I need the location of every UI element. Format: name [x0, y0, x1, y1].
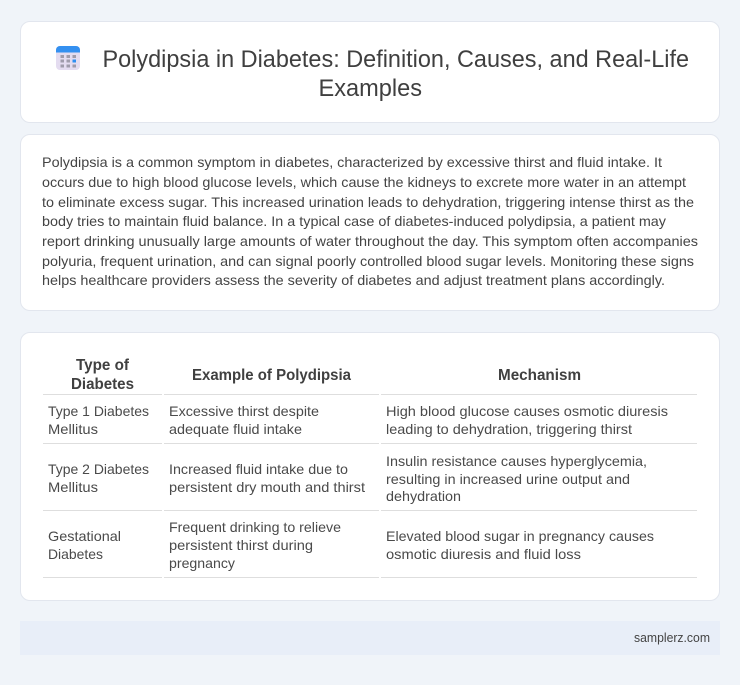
table row: Type 2 Diabetes Mellitus: Increased fluid intake due to — [169, 461, 348, 477]
panel: table card — [20, 332, 720, 601]
table row: Gestational Diabetes: Frequent drinking to relieve — [169, 519, 341, 535]
table row: Type 1 Diabetes Mellitus — [48, 403, 668, 437]
text block: description paragraph: Polydipsia is a common symptom in diabetes, characterized by excessive thirst and fluid intake. It — [42, 154, 662, 170]
table row: Gestational Diabetes: Gestational — [48, 528, 121, 544]
table row: Gestational Diabetes: osmotic diuresis and fluid loss — [386, 546, 581, 562]
panel: title card — [20, 21, 720, 123]
table row: Type 2 Diabetes Mellitus: dehydration — [386, 488, 461, 504]
table header row: Diabetes — [71, 376, 134, 393]
table row: Type 2 Diabetes Mellitus — [48, 453, 647, 504]
table row: Type 2 Diabetes Mellitus: persistent dry mouth and thirst — [169, 479, 365, 495]
table — [43, 357, 697, 578]
text block: description paragraph: occurs due to high blood glucose levels, which cause the kidneys to excrete more water in an attempt — [42, 174, 686, 190]
table row: Type 2 Diabetes Mellitus: Type 2 Diabetes — [48, 461, 149, 477]
text block: description paragraph: helps healthcare providers assess the severity of diabetes and adjust treatment plans accordingly. — [42, 272, 665, 288]
footer source text: samplerz.com — [634, 631, 710, 645]
title — [102, 46, 689, 102]
table row: Gestational Diabetes: Diabetes — [48, 546, 103, 562]
table header row — [71, 357, 581, 393]
text block: description paragraph: to eliminate excess sugar. This increased urination leads to dehydration, triggering intense thirst as the — [42, 194, 694, 210]
table row: Type 1 Diabetes Mellitus: leading to dehydration, triggering thirst — [386, 421, 632, 437]
table row: Type 1 Diabetes Mellitus: adequate fluid intake — [169, 421, 302, 437]
text block: description paragraph — [42, 154, 698, 288]
text block: description paragraph: report drinking unusually large amounts of water throughout the day. This symptom often accompanies — [42, 233, 698, 249]
title: Examples — [318, 75, 422, 102]
table row: Type 1 Diabetes Mellitus: Mellitus — [48, 421, 98, 437]
footer bar — [20, 621, 720, 655]
table row: Gestational Diabetes: Elevated blood sugar in pregnancy causes — [386, 528, 654, 544]
text block: description paragraph: polyuria, frequent urination, and can signal poorly controlled blood sugar levels. Monitoring these signs — [42, 253, 694, 269]
text block: description paragraph: body tries to maintain fluid balance. In a typical case of diabetes-induced polydipsia, a patient may — [42, 213, 666, 229]
table row: Gestational Diabetes — [48, 519, 654, 571]
table row: Type 1 Diabetes Mellitus: Type 1 Diabetes — [48, 403, 149, 419]
table row: Type 1 Diabetes Mellitus: High blood glucose causes osmotic diuresis — [386, 403, 668, 419]
table row: Type 2 Diabetes Mellitus: Insulin resistance causes hyperglycemia, — [386, 453, 647, 469]
table row: Type 2 Diabetes Mellitus: Mellitus — [48, 479, 98, 495]
icon: calendar grid — [56, 46, 80, 70]
table row: Type 1 Diabetes Mellitus: Excessive thirst despite — [169, 403, 319, 419]
table row: Type 2 Diabetes Mellitus: resulting in increased urine output and — [386, 471, 630, 487]
table header row: Mechanism — [498, 367, 581, 384]
title: Polydipsia in Diabetes: Definition, Causes, and Real-Life — [102, 46, 689, 73]
table header row: Type of — [76, 357, 130, 374]
table header row: Example of Polydipsia — [192, 367, 351, 384]
table row: Gestational Diabetes: persistent thirst during — [169, 537, 313, 553]
table row: Gestational Diabetes: pregnancy — [169, 555, 235, 571]
panel: description card — [20, 134, 720, 311]
